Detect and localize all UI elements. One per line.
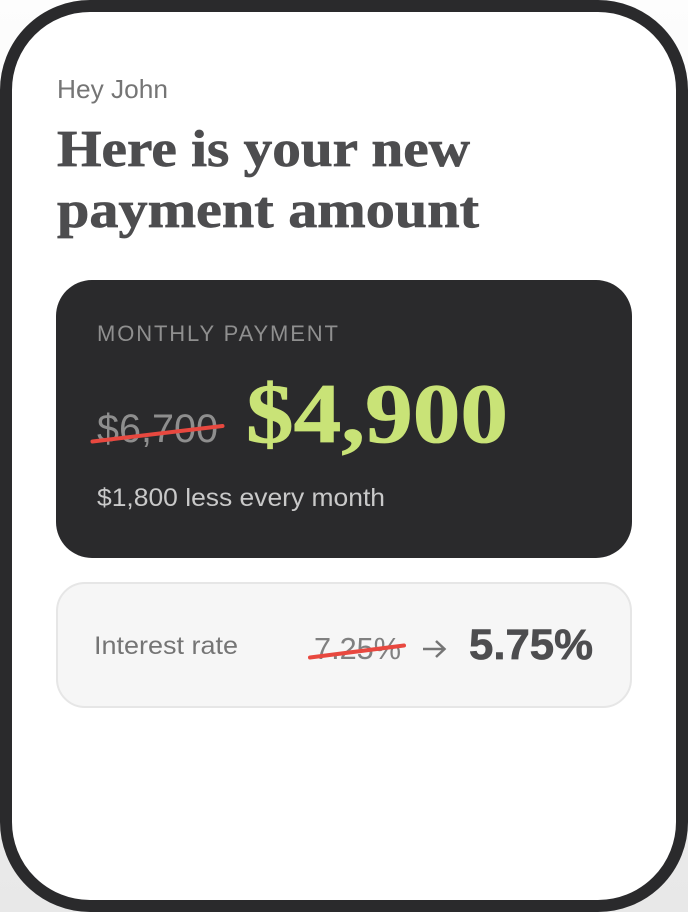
- savings note: $1,800 less every month: [97, 484, 385, 512]
- arrow: [423, 641, 444, 657]
- panel label: MONTHLY PAYMENT: [97, 321, 338, 346]
- panel: interest rate: [57, 583, 631, 707]
- new payment: $4,900: [246, 367, 508, 461]
- greeting: Hey John: [57, 74, 168, 104]
- interest rate label: Interest rate: [94, 632, 238, 660]
- old rate struck through: 7.25%: [314, 632, 401, 666]
- panel: monthly payment: [56, 280, 632, 558]
- new rate: 5.75%: [469, 621, 593, 669]
- title: payment amount: [57, 182, 480, 239]
- title: Here is your new: [57, 121, 470, 178]
- old payment struck through: $6,700: [97, 407, 218, 451]
- title: [57, 121, 480, 239]
